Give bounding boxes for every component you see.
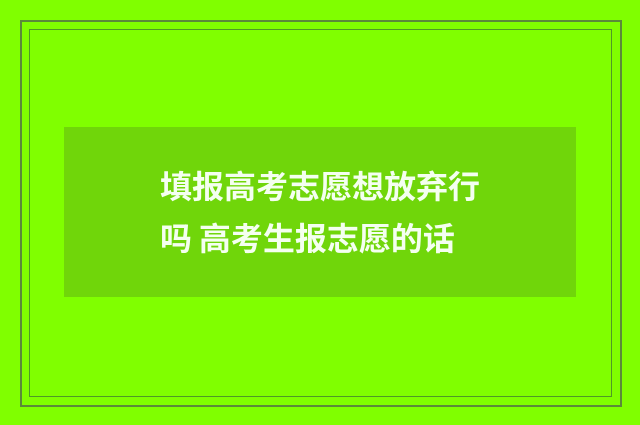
title: 填报高考志愿想放弃行	[160, 169, 480, 205]
panel: title band	[64, 127, 576, 297]
title	[160, 169, 480, 257]
title: 吗 高考生报志愿的话	[160, 221, 455, 257]
inner border frame	[29, 29, 612, 397]
